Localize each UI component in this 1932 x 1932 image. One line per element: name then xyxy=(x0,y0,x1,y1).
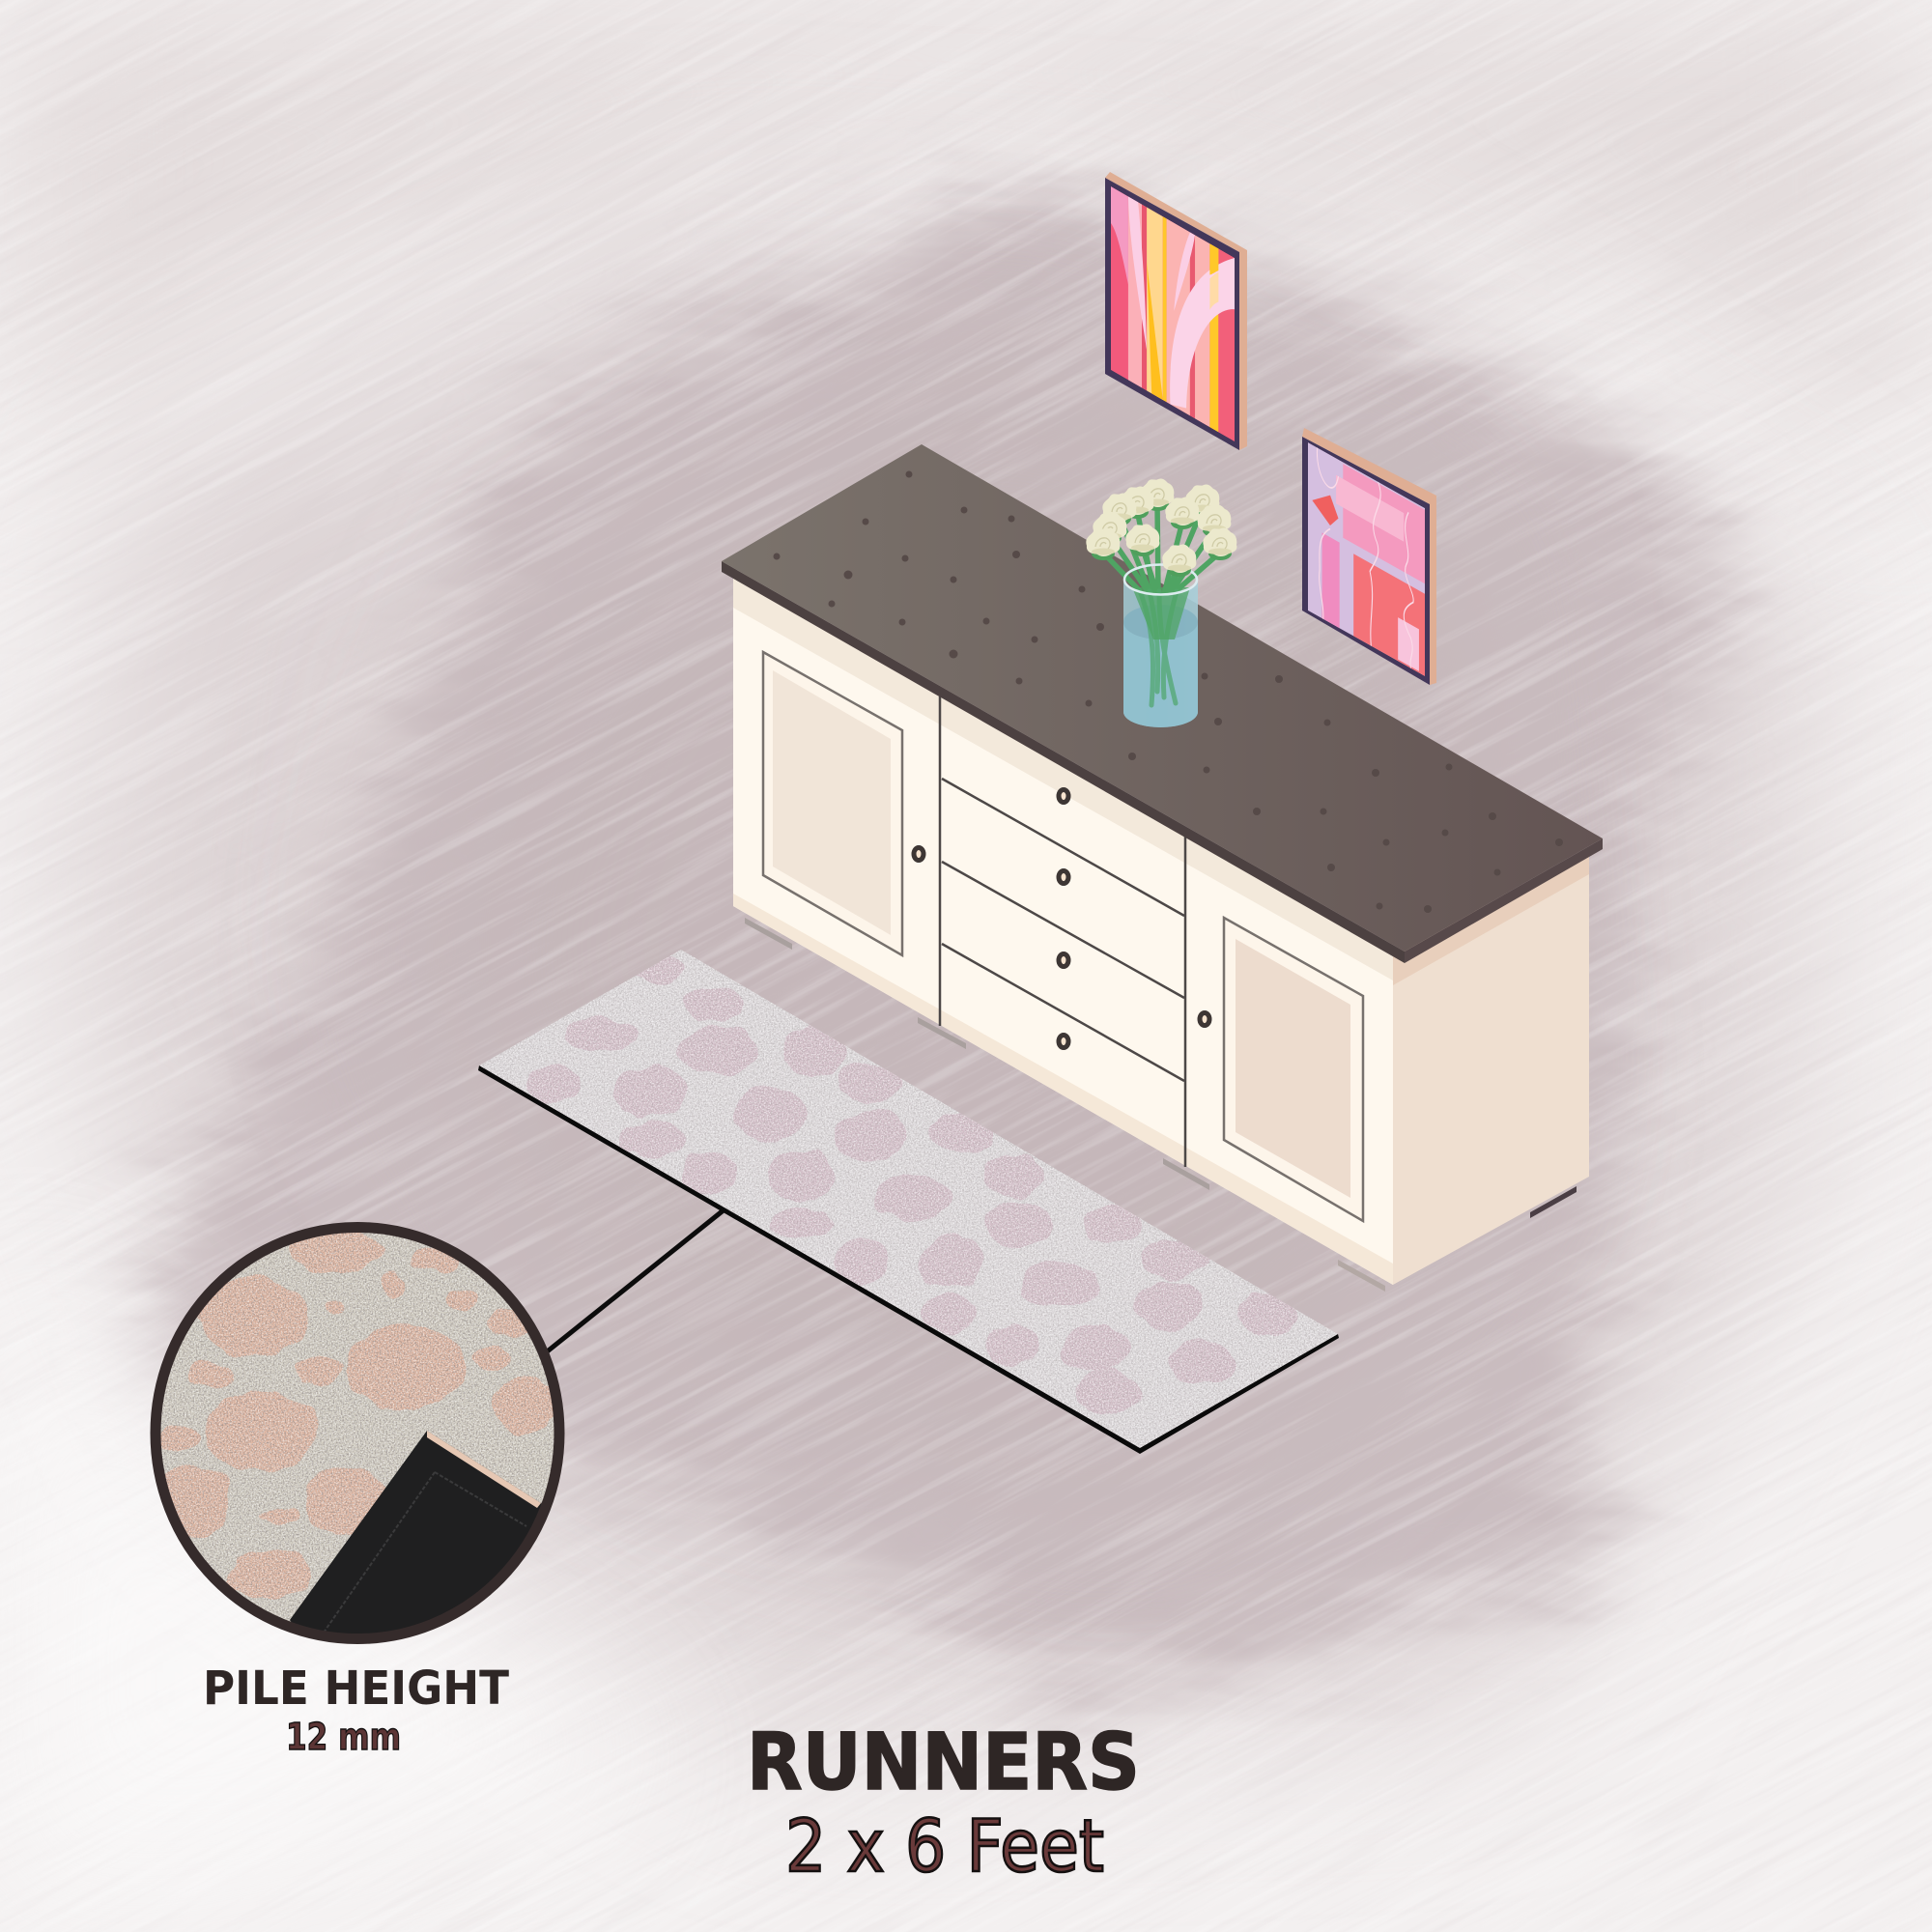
stems above the rim xyxy=(1103,502,1220,594)
connector line from rug to detail circle xyxy=(545,1209,724,1353)
subtitle: size: 2 x 6 Feet xyxy=(785,1804,1104,1889)
front face xyxy=(733,570,1393,1285)
folded black backing xyxy=(290,1431,580,1662)
label: 12 mm: 12 mm xyxy=(286,1716,401,1758)
flower vase xyxy=(1086,478,1236,727)
knobs xyxy=(914,790,1209,1047)
stems in the vase xyxy=(1140,591,1177,705)
plinth band xyxy=(733,894,1393,1285)
vase rim xyxy=(1124,564,1197,595)
runner rug xyxy=(473,947,1343,1454)
carpet fabric xyxy=(145,1217,570,1652)
circle outline xyxy=(156,1227,559,1638)
roses xyxy=(1086,478,1236,577)
detail circle: pile close-up xyxy=(145,1217,580,1662)
left door panel xyxy=(763,652,902,955)
counter top xyxy=(722,444,1603,963)
top shadow band on front xyxy=(733,570,1393,980)
right side face xyxy=(1393,848,1589,1285)
water xyxy=(1123,622,1198,727)
wall art: abstract stripes picture xyxy=(1105,172,1247,450)
vase glass body xyxy=(1123,580,1198,727)
rug surface xyxy=(473,947,1343,1454)
rug edge xyxy=(478,1065,1339,1454)
label: pile height: PILE HEIGHT xyxy=(203,1662,509,1716)
title: runners: RUNNERS xyxy=(747,1718,1140,1808)
speckles on counter top xyxy=(773,471,1563,913)
wall art: abstract blocks picture xyxy=(1302,428,1436,685)
door and drawer dividers xyxy=(940,696,1185,1167)
label: pile height xyxy=(203,1662,509,1758)
sideboard cabinet xyxy=(722,444,1603,1292)
right door panel xyxy=(1224,918,1363,1221)
feet xyxy=(745,918,1577,1292)
